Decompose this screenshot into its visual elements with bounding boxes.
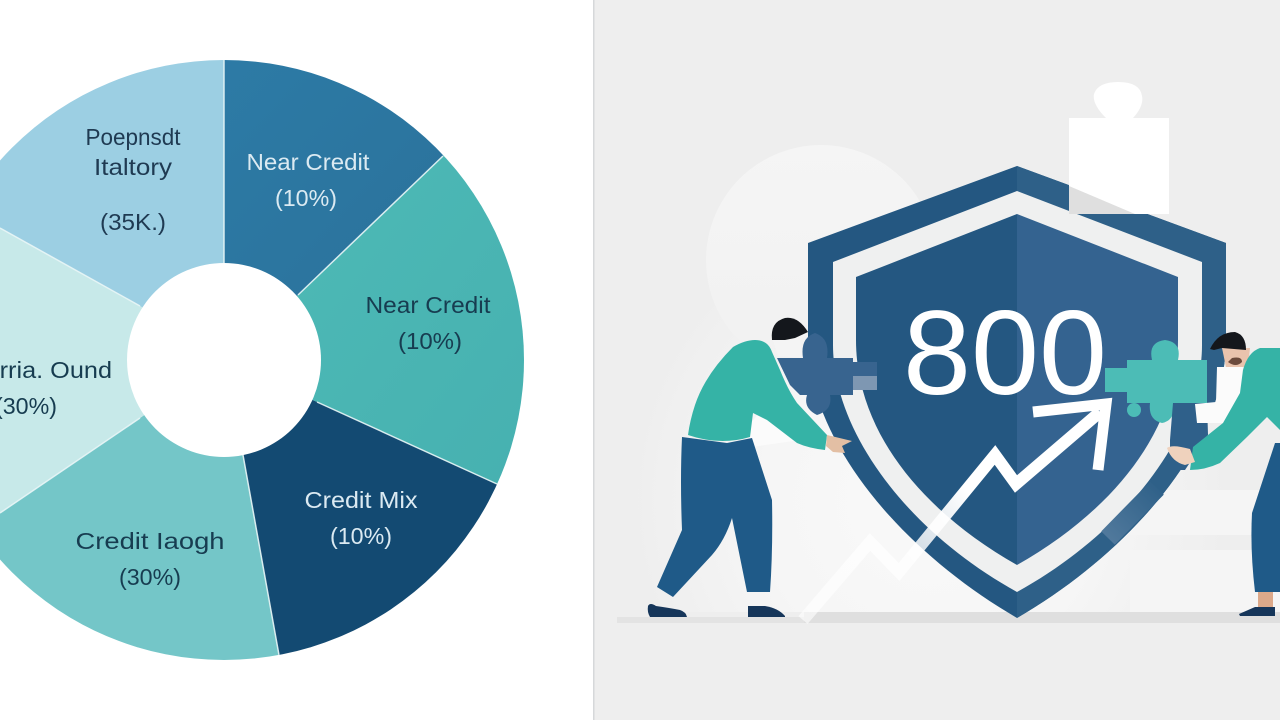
ankle: [1258, 592, 1273, 607]
puzzle block overlap: [1069, 186, 1135, 214]
blue piece under puzzle: [1170, 403, 1208, 470]
faint steps: [1110, 490, 1280, 612]
hair: [772, 318, 808, 340]
shield highlight: [1108, 488, 1157, 538]
faded puzzle block: [1069, 82, 1169, 214]
label: credit length: (30%): [119, 564, 181, 590]
label: payment history: Italtory: [94, 154, 173, 180]
label: credit length: Credit Iaogh: [76, 528, 224, 554]
arrow line: [803, 412, 1100, 620]
slice: new credit right: [297, 156, 524, 484]
shield inner left: [856, 214, 1017, 565]
hand: [1167, 446, 1195, 465]
right person: [1105, 332, 1280, 616]
shoes: [648, 604, 687, 617]
hand: [826, 435, 852, 453]
sweater: [1190, 348, 1280, 470]
small puzzle dot: [1127, 403, 1141, 417]
panel background: [593, 0, 1280, 720]
label: overdue: [0, 357, 112, 419]
trousers: [1251, 443, 1280, 592]
shield outer right shade: [1017, 166, 1226, 618]
shield: [808, 166, 1226, 618]
label: payment history: [86, 124, 181, 235]
panel: illustration: [593, 0, 1280, 720]
donut slices: [0, 40, 540, 680]
shield white band: [833, 191, 1202, 592]
arrow head: [1033, 404, 1106, 470]
head: [772, 317, 808, 358]
shirt: [745, 400, 800, 447]
label: new credit top: Near Credit: [246, 149, 370, 175]
faint background circle: [706, 145, 936, 375]
shield inner right: [1017, 214, 1178, 565]
sweater: [688, 340, 827, 450]
label: credit mix: Credit Mix: [304, 487, 418, 513]
label: payment history: (35K.): [100, 209, 166, 235]
panel: donut chart: [0, 40, 540, 680]
trousers: [657, 437, 772, 597]
label: new credit top: [246, 149, 370, 211]
hair: [1210, 332, 1246, 350]
slice: payment history: [0, 60, 224, 308]
label: credit mix: [304, 487, 418, 549]
shoe: [1239, 607, 1275, 616]
label: payment history: Poepnsdt: [86, 124, 181, 150]
shield outer: [808, 166, 1226, 618]
neck and shirt: [1195, 367, 1243, 423]
ground band: [617, 612, 1280, 623]
puzzle block white: [1069, 82, 1169, 214]
label: credit mix: (10%): [330, 523, 392, 549]
label: new credit top: (10%): [275, 185, 337, 211]
slice: overdue: [0, 229, 144, 512]
left person: [648, 317, 877, 617]
growth arrow: [803, 404, 1106, 620]
slice: new credit top: [224, 60, 444, 296]
label: new credit right: Near Credit: [366, 292, 491, 318]
score number: 800: [903, 286, 1107, 420]
label: credit length: [76, 528, 224, 590]
donut hole: [127, 263, 321, 457]
head: [1222, 348, 1250, 367]
teal puzzle piece: [1105, 340, 1207, 423]
slice: credit length: [0, 415, 279, 660]
label: new credit right: (10%): [398, 328, 462, 354]
slice: credit mix: [243, 400, 497, 655]
label: new credit right: [366, 292, 491, 354]
blue puzzle piece: [777, 333, 877, 415]
